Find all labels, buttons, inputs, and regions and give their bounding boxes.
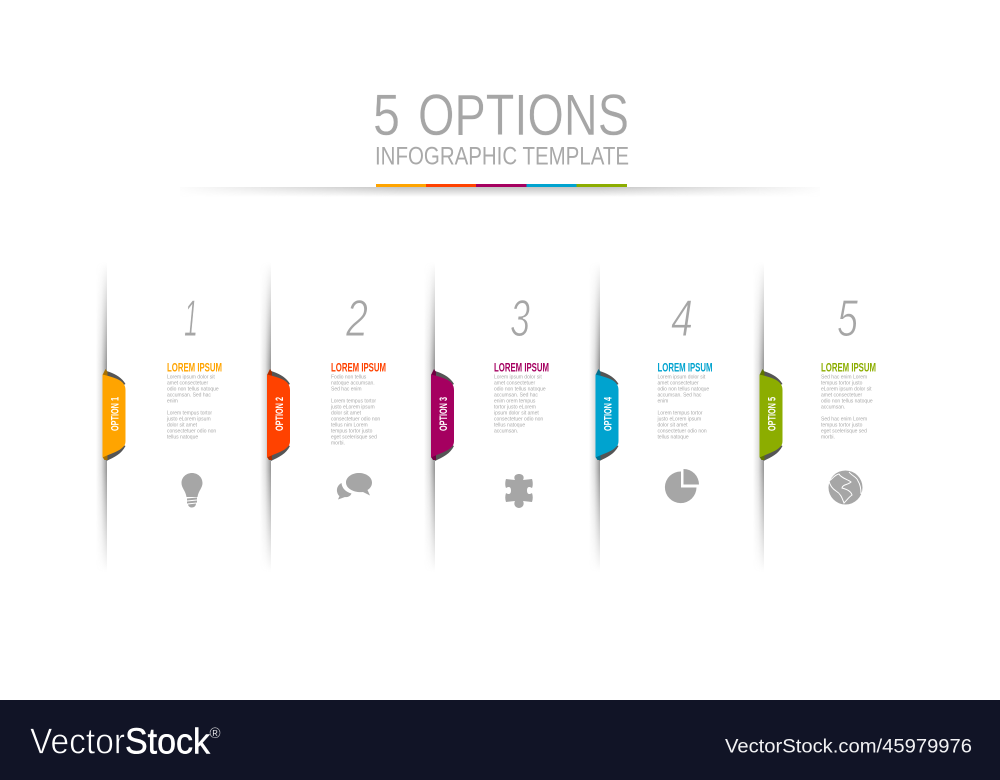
VectorStock logo: ® — [210, 725, 221, 742]
VectorStock logo: Stock — [125, 720, 211, 762]
text block: morbi. — [821, 434, 835, 440]
text block: dolor sit amet — [331, 410, 362, 416]
panel: option 1 — [102, 290, 222, 508]
icon: speech bubbles — [337, 473, 372, 500]
image id: VectorStock.com/45979976 — [725, 736, 972, 758]
text block: consectetuer odio non — [658, 428, 707, 434]
text block: Lorem tempus tortor — [167, 410, 212, 416]
text block: eget scelerisque sed — [331, 434, 377, 440]
title: INFOGRAPHIC TEMPLATE — [375, 142, 629, 170]
text block: accumsan. Sed hac — [494, 392, 538, 398]
number 5: 5 — [837, 290, 859, 348]
text block: dolor sit amet — [167, 422, 198, 428]
title colour bar — [203, 184, 798, 196]
footer bar — [0, 700, 1000, 780]
text block: eget scelerisque sed — [821, 428, 867, 434]
text block: amet consectetuer — [167, 380, 208, 386]
text block: enim — [167, 398, 178, 404]
text block: odio non tellus natoque — [494, 386, 546, 392]
text block: Lorem tempus tortor — [658, 410, 703, 416]
tab: option 1 — [102, 369, 126, 461]
text block: tempus tortor justo — [331, 428, 373, 434]
text block: tellus natoque — [658, 434, 689, 440]
text block: consectetuer odio non — [167, 428, 216, 434]
tab: option 2 — [267, 369, 290, 461]
icon: pie chart — [665, 469, 699, 503]
number 4: 4 — [671, 290, 693, 348]
panel: option 3 — [431, 290, 549, 508]
text block: eLorem ipsum dolor sit — [821, 386, 872, 392]
text block: Lorem ipsum dolor sit — [658, 374, 706, 380]
panel: option 2 — [267, 290, 386, 500]
text block: Fodio non tellus — [331, 374, 367, 380]
heading: LOREM IPSUM — [331, 362, 386, 374]
text block: morbi. — [331, 440, 345, 446]
number 2: 2 — [345, 290, 368, 348]
panel: option 5 — [760, 290, 876, 504]
number 3: 3 — [510, 290, 530, 348]
text block: natoque accumsan. — [331, 380, 375, 386]
tab: option 1: OPTION 1 — [109, 397, 121, 431]
text block: tempus tortor justo — [821, 422, 863, 428]
text block: justo eLorem ipsum — [166, 416, 211, 422]
text block: tortor justo eLorem — [494, 404, 536, 410]
tab: option 3 — [431, 369, 454, 461]
text block: enim — [658, 398, 668, 404]
heading: LOREM IPSUM — [494, 362, 549, 374]
title: 5 — [373, 83, 400, 148]
panel shadows — [96, 262, 764, 572]
heading: LOREM IPSUM — [167, 362, 222, 374]
text block: tellus natoque — [494, 422, 525, 428]
text block: dolor sit amet — [658, 422, 688, 428]
panel: option 1: 1 — [184, 290, 198, 348]
text block: odio non tellus natoque — [167, 386, 219, 392]
heading: LOREM IPSUM — [821, 362, 876, 374]
title — [373, 83, 629, 170]
text block: ipsum dolor sit amet — [494, 410, 539, 416]
text block: odio non tellus natoque — [821, 398, 873, 404]
tab: option 5: OPTION 5 — [766, 397, 778, 431]
text block: Sed hac enim Lorem — [821, 416, 867, 422]
text block: justo eLorem ipsum — [656, 416, 701, 422]
icon: light bulb — [182, 473, 202, 508]
text block: tellus nim Lorem — [331, 422, 368, 428]
text block: odio non tellus natoque — [658, 386, 709, 392]
text block: Lorem ipsum dolor sit — [494, 374, 542, 380]
icon: puzzle piece — [505, 474, 533, 508]
panel: option 4 — [596, 290, 712, 503]
text block: Sed hac enim Lorem — [821, 374, 867, 380]
text block: accumsan. Sed hac — [658, 392, 702, 398]
text block: accumsan. Sed hac — [167, 392, 211, 398]
text block: accumsan. — [494, 428, 518, 434]
text block: Lorem tempus tortor — [331, 398, 376, 404]
icon: globe — [828, 470, 862, 504]
text block: Lorem ipsum dolor sit — [167, 374, 215, 380]
heading: LOREM IPSUM — [658, 362, 712, 374]
tab: option 4 — [596, 369, 618, 461]
text block: accumsan. — [821, 404, 845, 410]
text block: tellus natoque — [167, 434, 198, 440]
text block: justo eLorem ipsum — [330, 404, 375, 410]
text block: consectetuer odio non — [331, 416, 380, 422]
tab: option 5 — [760, 369, 782, 461]
text block: tempus tortor justo — [821, 380, 863, 386]
text block: enim orem tempus — [494, 398, 536, 404]
text block: Sed hac enim — [331, 386, 362, 392]
text block: amet consectetuer — [658, 380, 699, 386]
title: OPTIONS — [418, 83, 629, 148]
text block: consectetuer odio non — [494, 416, 543, 422]
tab: option 2: OPTION 2 — [274, 397, 286, 431]
VectorStock logo — [30, 720, 221, 762]
text block: amet consectetuer — [494, 380, 535, 386]
VectorStock logo: Vector — [30, 720, 125, 762]
tab: option 4: OPTION 4 — [602, 396, 614, 431]
text block: amet consectetuer — [821, 392, 862, 398]
tab: option 3: OPTION 3 — [438, 397, 450, 431]
